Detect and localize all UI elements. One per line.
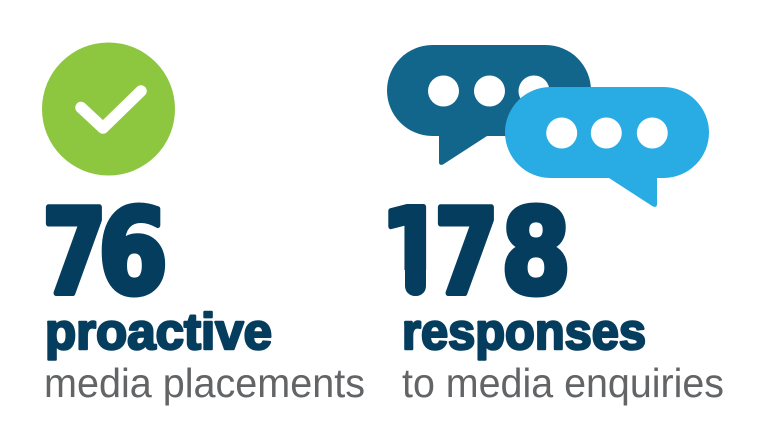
number: 178: 1 — [380, 183, 446, 321]
number: 178 — [388, 202, 568, 298]
infographic — [42, 42, 722, 406]
panel: proactive media placements — [42, 42, 365, 406]
icon: speech bubbles — [387, 45, 709, 207]
number: 76 — [42, 183, 168, 321]
number: 178: 8 — [501, 183, 571, 321]
icon: dark speech bubble — [387, 45, 591, 165]
icon: light blue speech bubble — [505, 87, 709, 207]
label: responses: responses — [402, 303, 646, 360]
label: to media enquiries: to media enquiries — [402, 360, 724, 406]
icon: green check mark — [42, 42, 175, 176]
number: 76: 6 — [98, 183, 168, 321]
label: media placements: media placements — [44, 360, 365, 406]
number: 178: 7 — [434, 183, 499, 321]
number: 76: 7 — [42, 183, 107, 321]
panel: responses to media enquiries — [380, 45, 724, 406]
label: proactive: proactive — [45, 303, 272, 360]
